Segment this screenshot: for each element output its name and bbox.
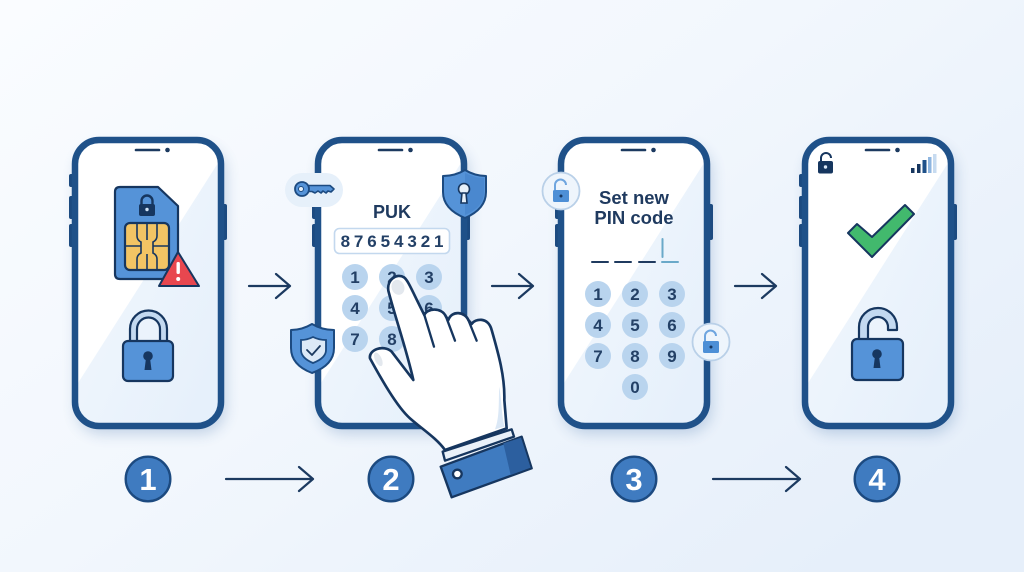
icon: key badge: [285, 173, 343, 207]
step number 1: [126, 457, 170, 501]
keypad: 8: [387, 330, 397, 349]
PIN entry dashes: [592, 239, 678, 262]
keypad: 8: [630, 347, 640, 366]
icon: SIM card: [115, 187, 178, 279]
heading: Set new PIN code: Set new: [599, 187, 670, 208]
icon: small unlocked status: [818, 153, 833, 174]
phone 1: locked SIM: [69, 140, 227, 434]
keypad: 9: [667, 347, 677, 366]
phone 3: set new PIN: [542, 140, 730, 434]
step number 2: 2: [382, 462, 400, 497]
icon: signal bars: [911, 154, 936, 173]
arrow: step 2 to 3: [492, 274, 533, 298]
keypad: 0: [630, 378, 640, 397]
step number 4: 4: [868, 462, 886, 497]
keypad: 3: [667, 285, 677, 304]
step number 3: [612, 457, 656, 501]
arrow: bottom 3 to 4: [713, 467, 800, 491]
icon: check shield: [291, 324, 334, 373]
heading: PUK: PUK: [373, 202, 411, 222]
phone 4: unlocked: [799, 140, 957, 434]
icon: unlock badge bottom: [692, 324, 730, 360]
keypad: [342, 264, 442, 352]
step number 2: [369, 457, 413, 501]
icon: pointing hand with cuff: [370, 276, 532, 497]
phone 2: PUK entry: [285, 140, 486, 434]
keypad: [585, 281, 685, 400]
step number 1: 1: [139, 462, 157, 497]
keypad: 4: [593, 316, 603, 335]
step number 4: [855, 457, 899, 501]
heading: Set new PIN code: PIN code: [594, 207, 674, 228]
icon: unlock badge top: [542, 172, 580, 210]
PUK input field: 87654321: [341, 232, 447, 251]
step number 3: 3: [625, 462, 643, 497]
icon: green check: [848, 205, 914, 257]
keypad: 7: [350, 330, 360, 349]
keypad: 7: [593, 347, 603, 366]
keypad: 1: [593, 285, 603, 304]
keypad: 5: [387, 299, 397, 318]
arrow: bottom 1 to 2: [226, 467, 313, 491]
keypad: 2: [387, 268, 397, 287]
icon: warning triangle: [159, 252, 199, 286]
icon: closed padlock: [123, 311, 173, 381]
keypad: 5: [630, 316, 640, 335]
keypad: 6: [424, 299, 434, 318]
keypad: 2: [630, 285, 640, 304]
arrow: step 3 to 4: [735, 274, 776, 298]
keypad: 6: [667, 316, 677, 335]
keypad: 3: [424, 268, 434, 287]
icon: keyhole shield: [443, 170, 486, 218]
keypad: 1: [350, 268, 360, 287]
keypad: 4: [350, 299, 360, 318]
heading: Set new PIN code: [594, 187, 674, 228]
arrow: step 1 to 2: [249, 274, 290, 298]
icon: open padlock: [852, 308, 903, 380]
